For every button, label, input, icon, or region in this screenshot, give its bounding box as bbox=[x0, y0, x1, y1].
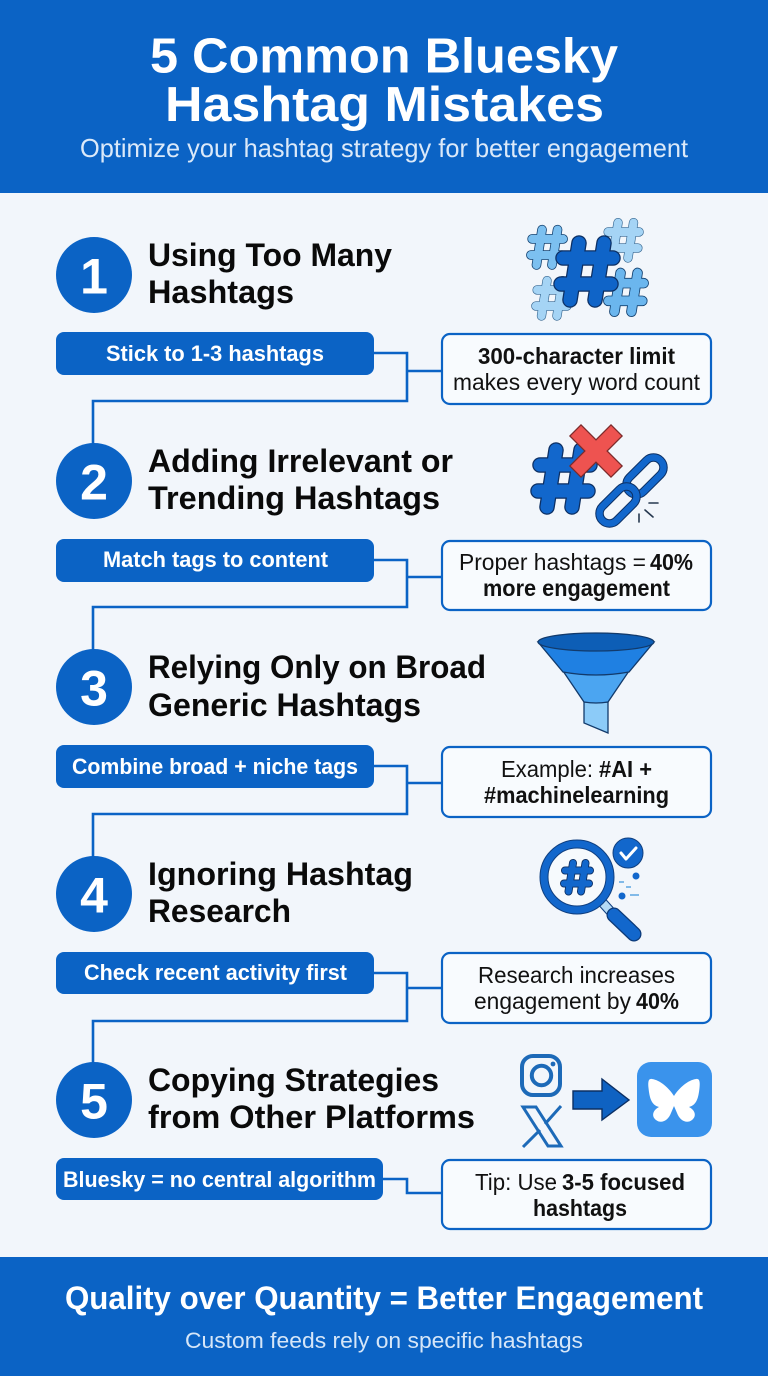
fact box 5 bbox=[442, 1160, 711, 1229]
heading 2 bbox=[148, 443, 453, 516]
fact box 5: hashtags bbox=[533, 1195, 627, 1221]
fact box 3: #machinelearning bbox=[484, 782, 669, 808]
icon: instagram bbox=[522, 1056, 560, 1095]
tip pill 1 bbox=[56, 332, 374, 375]
heading 4: Research bbox=[148, 893, 291, 929]
tip pill 3: Combine broad + niche tags bbox=[72, 754, 358, 779]
number badge 5 bbox=[56, 1062, 132, 1138]
heading 5: Copying Strategies bbox=[148, 1062, 439, 1098]
tip pill 5: Bluesky = no central algorithm bbox=[63, 1167, 376, 1192]
icon: crossed hashtag and broken link bbox=[538, 436, 668, 528]
number badge 4 bbox=[56, 856, 132, 932]
number badge 3: 3 bbox=[80, 660, 108, 716]
footer banner bbox=[0, 1257, 768, 1376]
number badge 1 bbox=[56, 237, 132, 313]
heading 3: Relying Only on Broad bbox=[148, 649, 486, 685]
fact box 5: Tip: Use bbox=[475, 1169, 557, 1195]
number badge 1: 1 bbox=[80, 248, 108, 304]
fact box 2: Proper hashtags = bbox=[459, 549, 646, 575]
fact box 1: 300-character limit bbox=[478, 343, 675, 369]
tip pill 4: Check recent activity first bbox=[84, 960, 347, 985]
heading 1 bbox=[148, 237, 392, 310]
icon: bluesky butterfly bbox=[637, 1062, 712, 1137]
fact box 1: makes every word count bbox=[453, 369, 701, 395]
fact box 4: engagement by bbox=[474, 988, 631, 1014]
connector 3 bbox=[93, 766, 441, 858]
heading 2: Trending Hashtags bbox=[148, 480, 440, 516]
title bbox=[150, 30, 618, 132]
fact box 4: Research increases bbox=[478, 962, 675, 988]
connector 2 bbox=[93, 560, 441, 651]
fact box 3 bbox=[442, 747, 711, 817]
heading 4: Ignoring Hashtag bbox=[148, 856, 413, 892]
fact box 3: Example: bbox=[501, 756, 593, 782]
heading 1: Using Too Many bbox=[148, 237, 392, 273]
icon: cluster of hashtags bbox=[531, 223, 644, 316]
fact box 1 bbox=[442, 334, 711, 404]
tip pill 4 bbox=[56, 952, 374, 994]
footer note: Custom feeds rely on specific hashtags bbox=[185, 1328, 583, 1353]
section 1: using too many hashtags bbox=[56, 223, 711, 445]
tip pill 1: Stick to 1-3 hashtags bbox=[106, 341, 324, 366]
tip pill 2: Match tags to content bbox=[103, 547, 328, 572]
fact box 4: 40% bbox=[636, 988, 679, 1014]
section 2: irrelevant or trending hashtags bbox=[56, 436, 711, 651]
number badge 4: 4 bbox=[80, 868, 108, 924]
heading 3 bbox=[148, 649, 486, 723]
number badge 2 bbox=[56, 443, 132, 519]
tip pill 5 bbox=[56, 1158, 383, 1200]
number badge 2: 2 bbox=[80, 454, 108, 510]
icon: magnifying glass with hashtag bbox=[544, 838, 643, 934]
heading 2: Adding Irrelevant or bbox=[148, 443, 453, 479]
icon: X logo bbox=[523, 1106, 561, 1147]
header banner bbox=[0, 0, 768, 193]
title: 5 Common Bluesky bbox=[150, 30, 618, 84]
fact box 2: more engagement bbox=[483, 575, 670, 601]
icon: funnel bbox=[538, 633, 654, 733]
footer headline: Quality over Quantity = Better Engagement bbox=[65, 1280, 703, 1316]
fact box 4 bbox=[442, 953, 711, 1023]
tip pill 2 bbox=[56, 539, 374, 582]
connector 5 bbox=[383, 1179, 441, 1193]
heading 3: Generic Hashtags bbox=[148, 687, 421, 723]
tip pill 3 bbox=[56, 745, 374, 788]
title: Hashtag Mistakes bbox=[165, 78, 604, 132]
heading 1: Hashtags bbox=[148, 274, 294, 310]
heading 4 bbox=[148, 856, 413, 929]
connector 4 bbox=[93, 973, 441, 1064]
subtitle: Optimize your hashtag strategy for better engagement bbox=[80, 133, 689, 163]
section 4: ignoring hashtag research bbox=[56, 838, 711, 1064]
fact box 2: 40% bbox=[650, 549, 693, 575]
heading 5: from Other Platforms bbox=[148, 1099, 475, 1135]
heading 5 bbox=[148, 1062, 475, 1135]
fact box 5: 3-5 focused bbox=[562, 1169, 685, 1195]
arrow bbox=[573, 1079, 629, 1120]
connector 1 bbox=[93, 353, 441, 445]
section 5: copying strategies bbox=[56, 1056, 712, 1229]
fact box 2 bbox=[442, 541, 711, 610]
section 3: relying on broad hashtags bbox=[56, 633, 711, 858]
fact box 3: #AI + bbox=[599, 756, 652, 782]
number badge 3 bbox=[56, 649, 132, 725]
number badge 5: 5 bbox=[80, 1074, 108, 1130]
